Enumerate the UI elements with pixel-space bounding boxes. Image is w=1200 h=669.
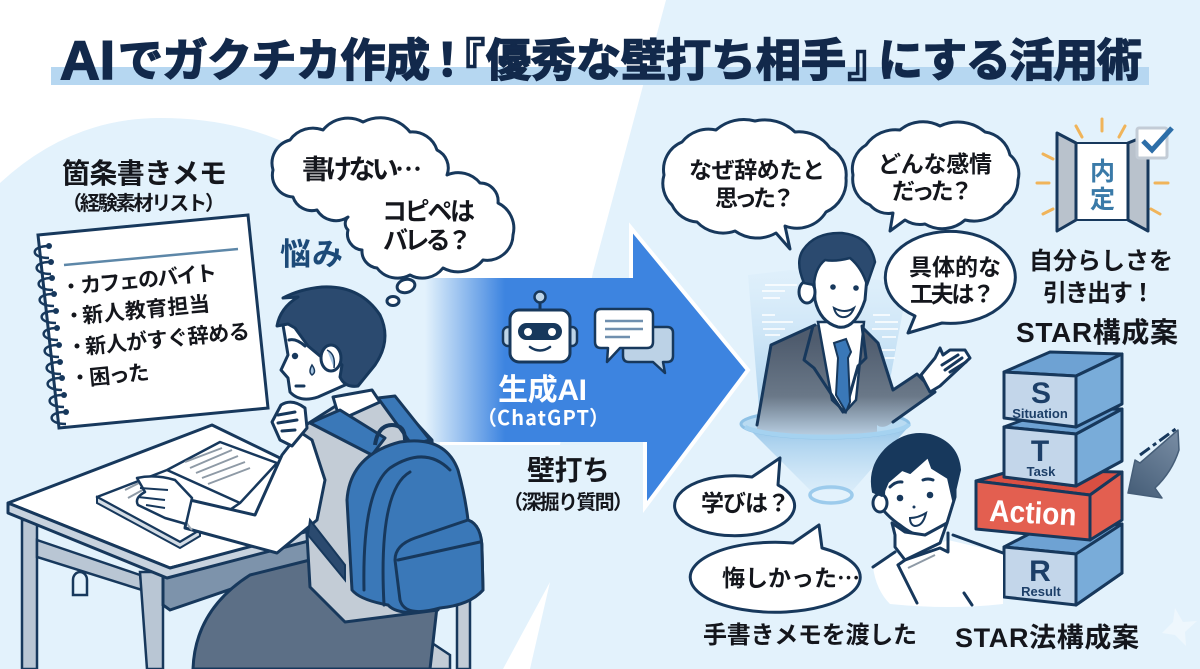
illustration: interviewer xyxy=(757,233,970,438)
label: ChatGPT: （ChatGPT） xyxy=(486,402,600,431)
title: にする活用術 xyxy=(878,35,1141,86)
block: T: Task xyxy=(1027,464,1056,479)
desk legs xyxy=(22,520,163,669)
title: 優秀な壁打ち相手 xyxy=(486,35,846,86)
ring: front rim xyxy=(745,424,909,437)
label: generative AI: 生成AI xyxy=(498,374,587,407)
bubble text line 2: 工夫は？ xyxy=(910,281,995,307)
block: R: Result xyxy=(1021,584,1062,599)
title xyxy=(51,29,1149,91)
jacket outline xyxy=(757,325,935,425)
bubble text line 2: だった？ xyxy=(892,178,973,204)
bubble text: 学びは？ xyxy=(701,490,790,516)
block: R: R xyxy=(1029,555,1051,588)
bubble text line 1: どんな感情 xyxy=(878,151,992,177)
thought: found out: バレる？ xyxy=(383,227,472,255)
face xyxy=(883,452,955,535)
bubble text line 1: なぜ辞めたと xyxy=(689,157,825,183)
door text: 定 xyxy=(1090,186,1115,214)
speech bubble: what emotion xyxy=(852,122,1019,231)
label: worries: 悩み xyxy=(280,237,343,272)
block: Action xyxy=(976,470,1122,540)
heading: STAR proposal: STAR構成案 xyxy=(1016,317,1178,348)
thought bubble xyxy=(272,118,514,305)
block: T: T xyxy=(1031,435,1049,468)
hair xyxy=(872,434,960,500)
subheading: experience material list: （経験素材リスト） xyxy=(62,192,225,215)
diagram: STAR block stack xyxy=(976,352,1122,605)
icon: robot xyxy=(503,292,577,362)
speech bubble: why quit xyxy=(663,119,846,249)
illustration: student at desk xyxy=(8,287,483,669)
block: R xyxy=(1004,524,1122,605)
bubble text line 1: 具体的な xyxy=(909,254,1001,280)
jacket xyxy=(757,325,935,438)
icon: chat bubbles xyxy=(595,309,673,373)
title: でガクチカ作成 xyxy=(118,35,430,86)
head xyxy=(813,250,868,327)
heading: bullet memo: 箇条書きメモ xyxy=(62,158,227,189)
hand at chin xyxy=(272,402,307,446)
tie xyxy=(834,339,851,412)
speech bubble: frustrated xyxy=(690,525,860,612)
arrow: dark curved arrow xyxy=(1128,428,1179,498)
desk top xyxy=(8,425,320,568)
label: wall-bouncing: 壁打ち xyxy=(527,455,610,486)
title: 』 xyxy=(848,35,871,86)
memo item 1: カフェのバイト xyxy=(79,262,218,298)
icon: check box xyxy=(1137,128,1172,158)
label: deep-dive questions: （深掘り質問） xyxy=(503,491,633,514)
block: T xyxy=(1004,409,1122,486)
arm and hand on book xyxy=(137,432,325,553)
memo item 2: 新人教育担当 xyxy=(81,293,211,328)
trousers xyxy=(193,560,437,669)
panel: memo page xyxy=(35,215,268,428)
vest xyxy=(298,398,438,622)
caption: STAR method proposal: STAR法構成案 xyxy=(955,623,1139,653)
shirt xyxy=(873,540,1003,607)
block: S: S xyxy=(1031,377,1051,410)
lapels xyxy=(804,326,866,412)
shirt xyxy=(818,322,864,412)
ring: small hologram base xyxy=(810,487,852,503)
open book xyxy=(97,442,277,548)
backpack xyxy=(308,396,483,612)
under-desk drawer xyxy=(163,530,310,610)
head xyxy=(277,287,385,399)
title: 『 xyxy=(462,35,485,86)
open hand xyxy=(921,348,970,392)
collar and hand xyxy=(892,523,947,560)
block: Action: Action xyxy=(989,494,1077,533)
thought: cannot write: 書けない… xyxy=(302,148,422,187)
hologram beam xyxy=(748,270,910,490)
block: S: Situation xyxy=(1012,406,1068,421)
speech bubble: specifics xyxy=(885,231,1015,333)
bubble text: 悔しかった… xyxy=(722,559,860,593)
arrow: blue process arrow xyxy=(425,228,748,507)
memo item 4: 困った xyxy=(88,361,150,390)
caption: handed handwritten memo: 手書きメモを渡した xyxy=(703,622,917,649)
title: ！ xyxy=(436,35,459,86)
door text: 内 xyxy=(1090,158,1115,186)
block: S xyxy=(1004,352,1122,427)
shirt collar xyxy=(333,390,380,420)
memo item 3: 新人がすぐ辞める xyxy=(84,319,251,359)
arrow: white outline of head xyxy=(631,228,748,507)
title: AI xyxy=(60,29,115,91)
caption: bring out yourself: 自分らしさを xyxy=(1029,248,1173,275)
ring: large hologram ring xyxy=(741,410,909,438)
chair xyxy=(390,595,470,669)
illustration: student with memo xyxy=(872,434,1003,607)
bubble text line 2: 思った？ xyxy=(715,185,795,211)
speech bubble: learning xyxy=(675,458,795,536)
caption: line 2: 引き出す！ xyxy=(1043,280,1155,307)
icon: offer door xyxy=(1037,119,1172,231)
thought: copy paste: コピペは xyxy=(382,198,475,226)
